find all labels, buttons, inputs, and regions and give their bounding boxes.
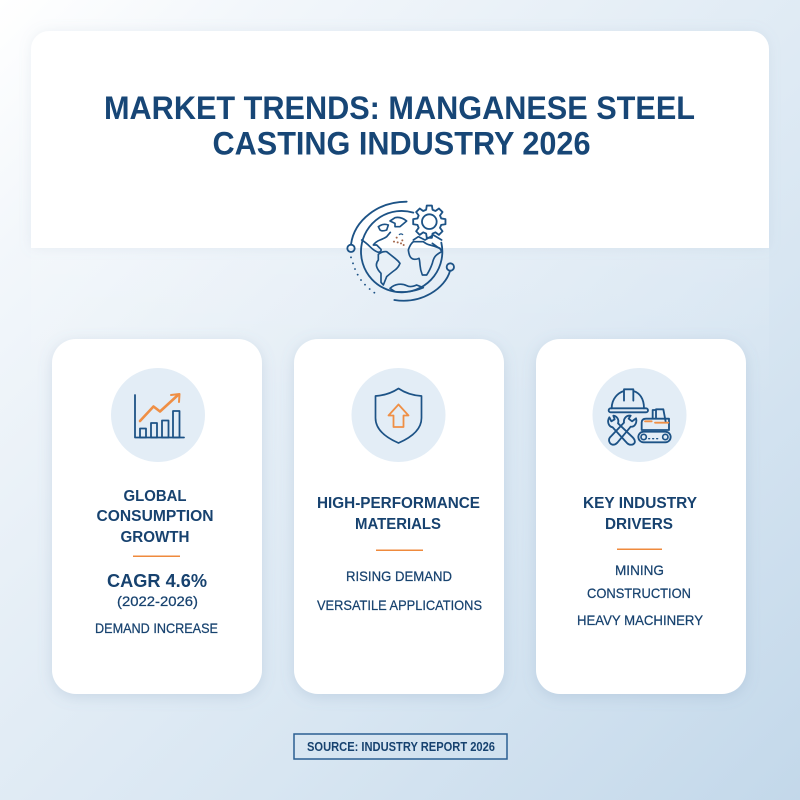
globe outline — [361, 211, 442, 292]
panel: title header — [31, 31, 769, 248]
icon: growth chart — [111, 368, 205, 462]
arc end nodes — [347, 245, 355, 252]
icon: hard hat, tools and bulldozer — [592, 368, 686, 462]
title — [104, 90, 695, 162]
gear — [413, 206, 445, 238]
panel: lower background — [31, 248, 769, 408]
heading: KEY INDUSTRY — [583, 495, 697, 512]
demand label: DEMAND INCREASE — [95, 620, 218, 636]
date range: (2022-2026) — [117, 593, 198, 609]
card background — [52, 339, 262, 694]
divider — [617, 548, 662, 550]
antarctica — [390, 284, 423, 292]
bulldozer cab — [653, 409, 666, 422]
heading: GLOBAL — [124, 488, 187, 505]
south america — [376, 252, 400, 285]
africa — [408, 242, 442, 275]
hard hat — [612, 389, 644, 408]
heading: DRIVERS — [605, 516, 673, 533]
list item: VERSATILE APPLICATIONS — [317, 597, 482, 613]
heading: MATERIALS — [355, 516, 441, 533]
statistic: CAGR: CAGR 4.6% — [107, 570, 207, 591]
heading — [583, 495, 697, 533]
icon: shield with arrow — [352, 368, 446, 462]
orange stripe — [645, 421, 668, 423]
source box — [294, 734, 507, 759]
bulldozer body — [642, 419, 669, 430]
heading: CONSUMPTION — [96, 508, 214, 525]
europe — [413, 235, 442, 250]
list item: MINING — [615, 562, 664, 578]
heading: HIGH-PERFORMANCE — [317, 495, 480, 512]
divider — [376, 550, 423, 551]
title: CASTING INDUSTRY 2026 — [212, 126, 590, 162]
map location dots — [393, 234, 405, 246]
card background — [536, 339, 746, 694]
icon: globe with gear — [347, 202, 454, 301]
card background — [294, 339, 504, 694]
panel: global consumption growth — [52, 339, 262, 694]
panel: key industry drivers — [536, 339, 746, 694]
tracks — [638, 432, 671, 442]
source box: SOURCE: INDUSTRY REPORT 2026 — [307, 740, 495, 754]
divider — [133, 556, 180, 557]
heading: GROWTH — [120, 529, 190, 546]
list item: CONSTRUCTION — [587, 585, 691, 601]
dotted arc — [350, 256, 375, 294]
wrench left — [608, 416, 635, 445]
outer arc right — [394, 271, 450, 301]
list item: RISING DEMAND — [346, 568, 452, 584]
outer arc left — [351, 202, 407, 244]
north america — [362, 224, 390, 252]
heading — [96, 488, 214, 546]
greenland — [390, 217, 407, 227]
panel: high-performance materials — [294, 339, 504, 694]
heading — [317, 495, 480, 533]
wrench right — [609, 416, 636, 445]
title: MARKET TRENDS: MANGANESE STEEL — [104, 90, 695, 126]
list item: HEAVY MACHINERY — [577, 612, 704, 628]
